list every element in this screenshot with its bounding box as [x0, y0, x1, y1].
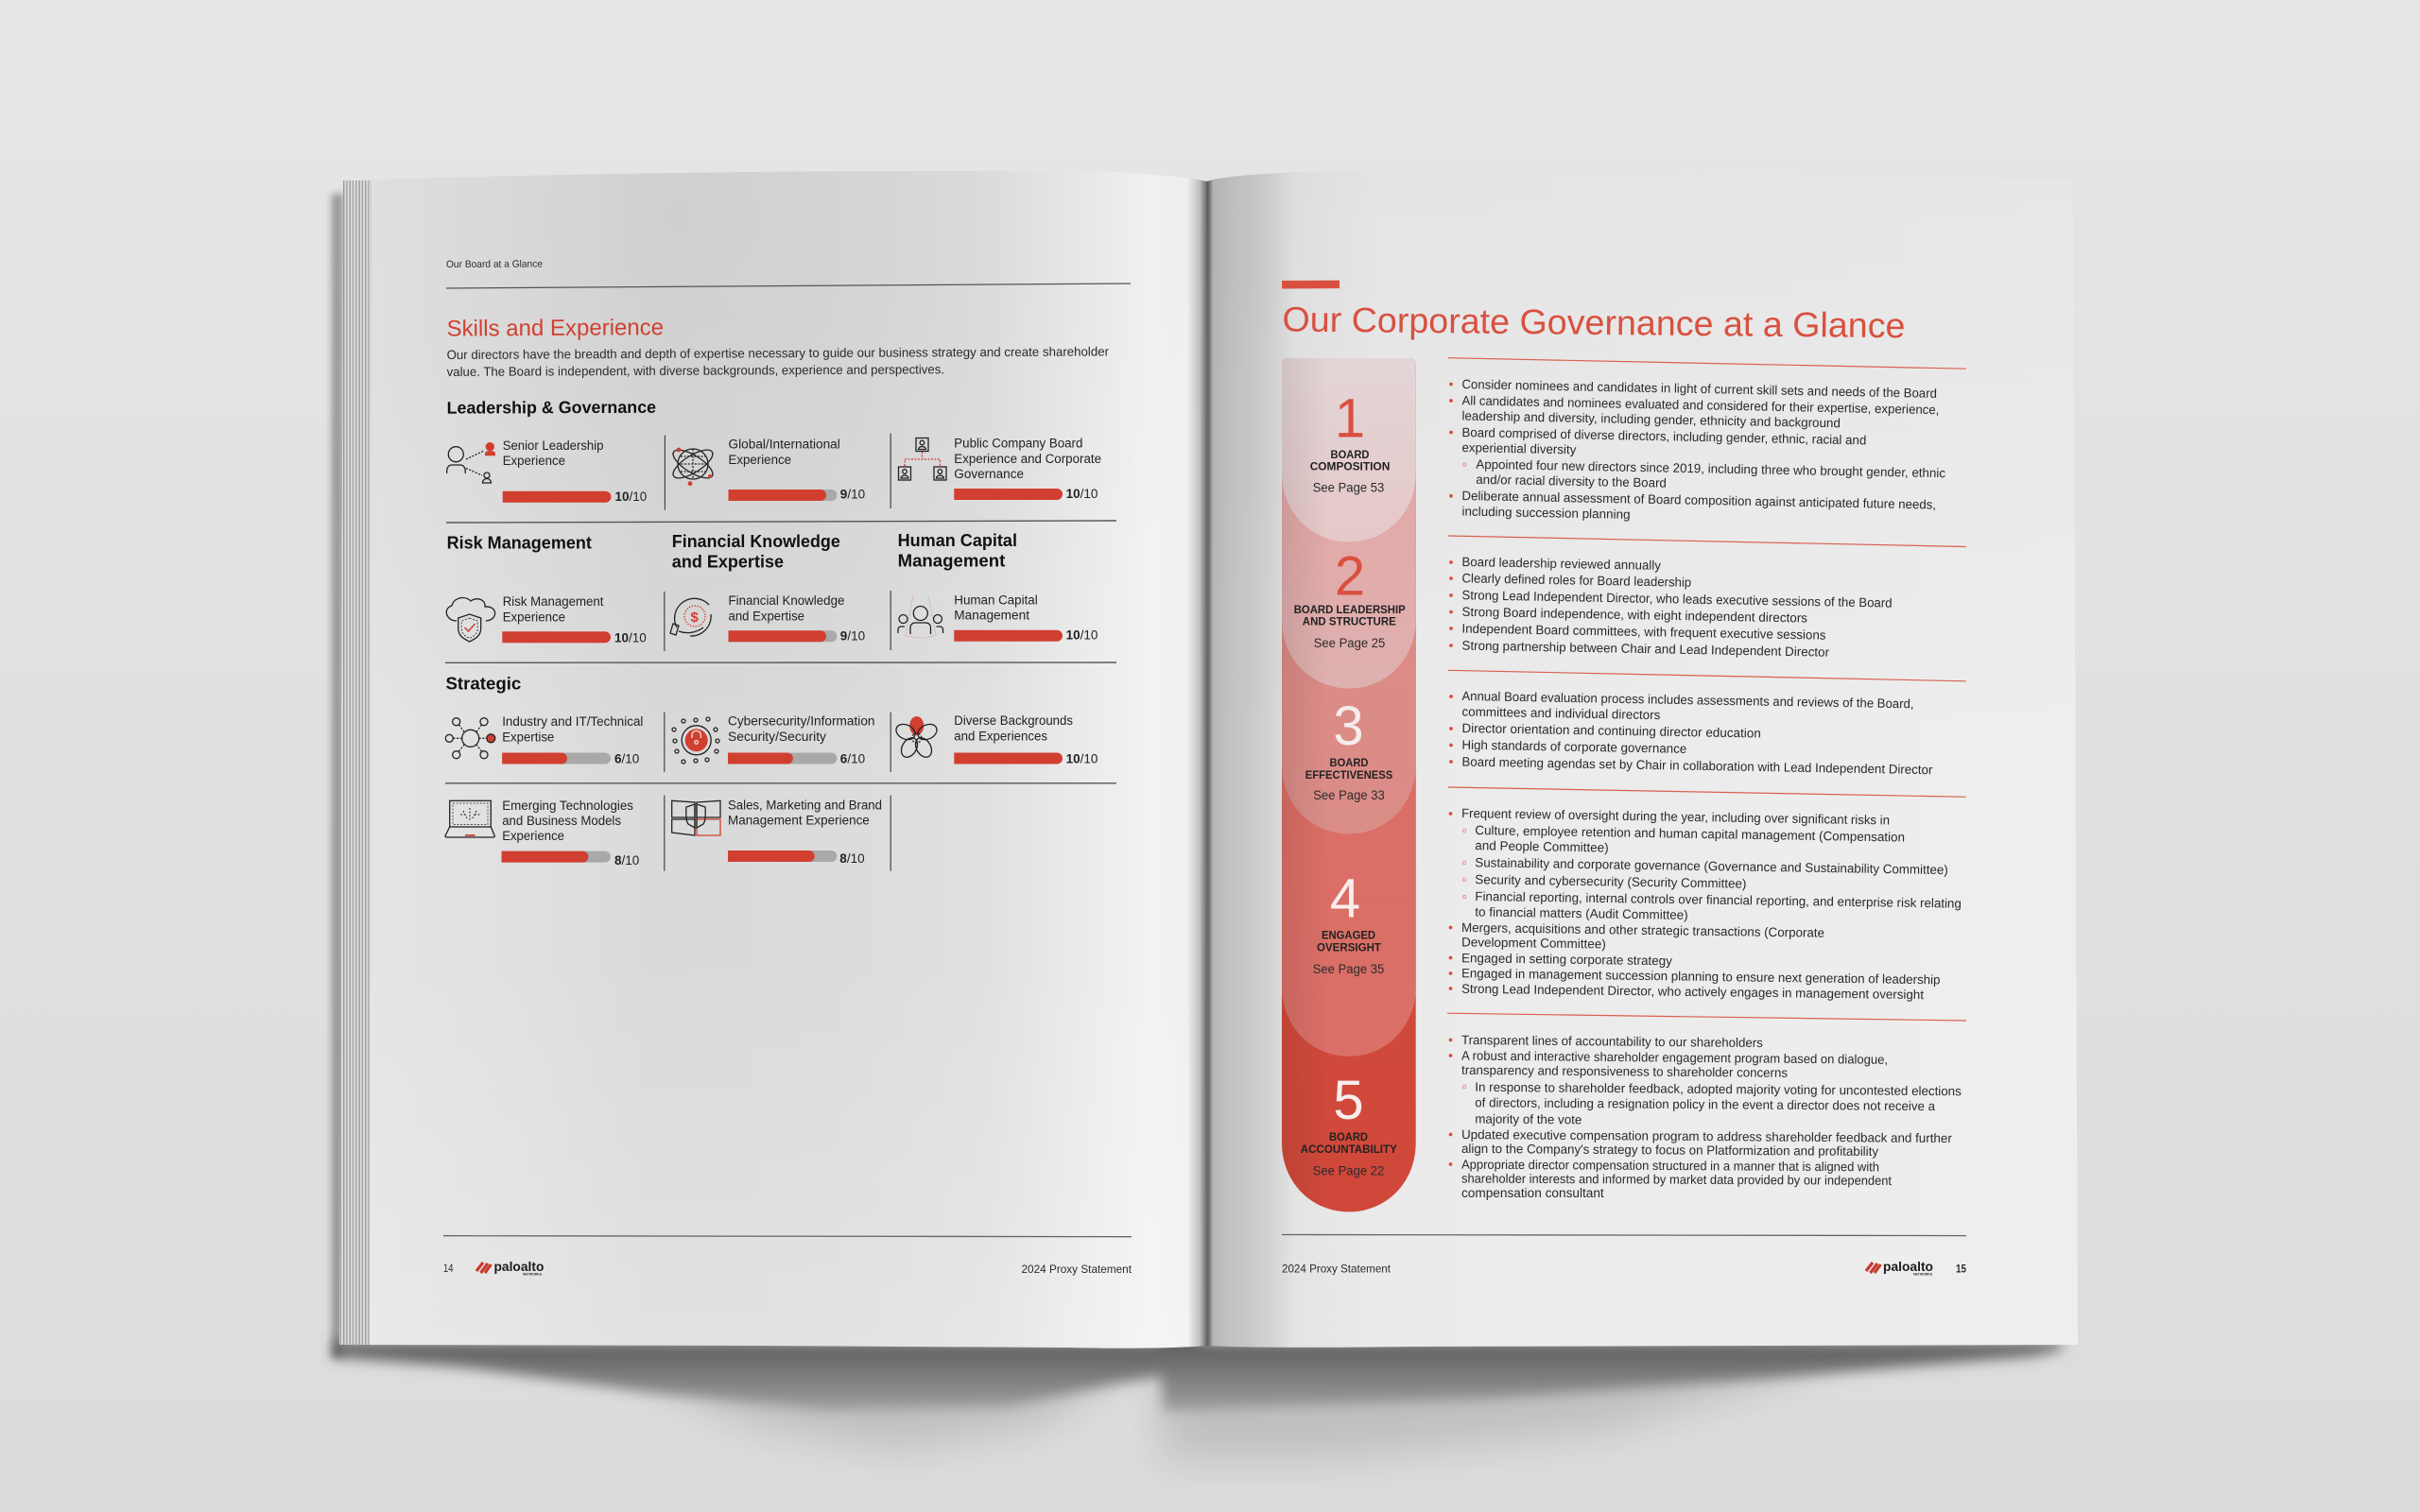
skill: sales and marketing: Sales, Marketing and Brand — [728, 799, 882, 813]
intro paragraph: Our directors have the breadth and depth of expertise necessary to guide our business strategy and create shareholder — [447, 344, 1110, 362]
bullets: engaged oversight: Culture, employee retention and human capital management (Compensation — [1475, 823, 1905, 845]
heading: human capital: Management — [898, 551, 1005, 570]
bullets: board effectiveness: committees and individual directors — [1461, 705, 1661, 722]
heading: leadership and governance: Leadership & Governance — [447, 398, 656, 418]
score bar 8/10 — [502, 851, 611, 863]
pillar 3 labels: 3 — [1333, 696, 1364, 757]
bullets: board accountability: Transparent lines of accountability to our shareholders — [1461, 1033, 1763, 1050]
skill: global international — [669, 437, 865, 502]
icon: leadership people — [447, 442, 495, 483]
skill: cybersecurity: Cybersecurity/Information — [728, 714, 875, 728]
score bar 8/10 — [728, 850, 837, 862]
bullets: board composition: Consider nominees and candidates in light of current skill sets and needs of the Board — [1461, 377, 1937, 401]
bullets: board effectiveness — [1449, 689, 1933, 777]
skill: global international: Global/International — [728, 437, 840, 452]
pillar 5 labels: 5 — [1333, 1070, 1364, 1131]
bullets: board leadership and structure: Board leadership reviewed annually — [1461, 555, 1661, 573]
pillar 3 labels — [1305, 696, 1392, 802]
pillar 1 labels: BOARD — [1331, 448, 1370, 461]
pillar 4 labels: 4 — [1330, 868, 1360, 930]
right page — [1207, 170, 2078, 1348]
heading: human capital — [898, 531, 1017, 570]
bullets: engaged oversight: Engaged in setting corporate strategy — [1461, 951, 1672, 968]
bullets: board accountability: Appropriate director compensation structured in a manner that is aligned with — [1461, 1158, 1879, 1174]
pillar 3 labels: EFFECTIVENESS — [1305, 768, 1392, 782]
bullets: board effectiveness: Director orientation and continuing director education — [1461, 721, 1761, 741]
right page sheet — [1207, 170, 2078, 1348]
logo: palo alto: paloalto — [493, 1259, 544, 1274]
left page — [339, 168, 1210, 1351]
skill: senior leadership: Senior Leadership — [503, 438, 603, 453]
icon: org chart — [898, 438, 946, 480]
score bar 10/10 — [954, 489, 1063, 500]
skill: industry and technical: Industry and IT/Technical — [502, 714, 643, 729]
bullets: board leadership and structure — [1449, 555, 1893, 660]
bullets: board accountability: of directors, including a resignation policy in the event a director does not receive a — [1475, 1095, 1936, 1113]
icon: globe with orbits — [669, 445, 717, 486]
bullets: engaged oversight: Engaged in management succession planning to ensure next generation of leadership — [1461, 966, 1941, 987]
skill: cybersecurity — [672, 714, 875, 765]
icon: hand with dollar — [670, 598, 711, 636]
skill: cybersecurity: Security/Security — [728, 730, 826, 744]
bullets: board effectiveness: Board meeting agendas set by Chair in collaboration with Lead Independent Director — [1461, 755, 1933, 777]
icon: shield panels — [672, 800, 720, 835]
pillar 1 labels — [1310, 387, 1390, 495]
score bar 6/10 — [502, 752, 611, 764]
skill: diverse backgrounds — [893, 713, 1098, 765]
skill: global international: Experience — [728, 453, 791, 467]
footer: right page — [1282, 1259, 1966, 1276]
bullets: engaged oversight: Security and cybersecurity (Security Committee) — [1475, 872, 1747, 891]
panel: governance pillars column — [1282, 358, 1416, 1211]
pillar 4 labels: See Page 35 — [1313, 962, 1384, 976]
pillar 1 labels: COMPOSITION — [1310, 460, 1390, 473]
footer: left page: 2024 Proxy Statement — [1021, 1263, 1132, 1276]
pillar 5 labels: See Page 22 — [1313, 1163, 1384, 1177]
footer: left page: 14 — [443, 1263, 454, 1275]
pillar 2 labels: 2 — [1335, 546, 1365, 608]
intro paragraph — [447, 344, 1110, 379]
skill: public company board: Public Company Board — [954, 437, 1082, 450]
bullets: board leadership and structure: Clearly defined roles for Board leadership — [1461, 571, 1691, 590]
pillar 1 shape — [1282, 358, 1416, 542]
score bar 9/10 — [728, 630, 837, 642]
score bar 10/10 — [954, 630, 1063, 642]
bullets: engaged oversight: Financial reporting, internal controls over financial reporting, and enterprise risk relating — [1475, 889, 1962, 911]
footer: right page: 2024 Proxy Statement — [1282, 1263, 1392, 1276]
pillar 2 labels — [1294, 546, 1406, 650]
skill: sales and marketing — [672, 799, 882, 866]
bullets: engaged oversight: and People Committee) — [1475, 838, 1609, 855]
heading: human capital: Human Capital — [898, 531, 1017, 550]
bullets: board composition: leadership and diversity, including gender, ethnicity and background — [1461, 408, 1841, 430]
skill: public company board: Governance — [954, 467, 1024, 481]
skill: sales and marketing: Management Experience — [728, 813, 870, 828]
heading: financial knowledge: Financial Knowledge — [672, 532, 840, 551]
icon: three people — [898, 595, 943, 638]
bullets: board composition: and/or racial diversity to the Board — [1476, 472, 1667, 490]
skill: emerging technologies — [445, 799, 639, 868]
skill: emerging technologies: and Business Models — [502, 814, 621, 828]
skill: public company board — [898, 437, 1101, 501]
pillar 2 labels: See Page 25 — [1314, 636, 1385, 650]
book shadow — [332, 194, 2062, 1460]
bullets: board effectiveness: High standards of corporate governance — [1461, 738, 1686, 756]
pillar 2 shape — [1282, 358, 1416, 688]
skill: industry and technical: 6/10 — [614, 751, 639, 765]
footer: left page — [443, 1259, 1132, 1276]
icon: hand with dollar: $ — [690, 610, 700, 626]
icon: flower — [893, 716, 940, 760]
logo: palo alto: NETWORKS — [1913, 1272, 1933, 1276]
pillar side shading — [1282, 358, 1416, 1211]
pillar 5 labels: BOARD — [1329, 1130, 1368, 1143]
heading: financial knowledge: and Expertise — [672, 552, 784, 571]
intro paragraph: value. The Board is independent, with diverse backgrounds, experience and perspectives. — [447, 362, 944, 379]
bullets: engaged oversight: to financial matters (Audit Committee) — [1475, 905, 1688, 922]
logo: palo alto: NETWORKS — [523, 1272, 543, 1276]
page shading bottom — [685, 1346, 957, 1348]
pillar 3 labels: See Page 33 — [1313, 788, 1385, 802]
heading: financial knowledge — [672, 532, 840, 571]
skill: diverse backgrounds: and Experiences — [954, 729, 1047, 743]
skill: emerging technologies: 8/10 — [614, 853, 639, 868]
skill: industry and technical: Expertise — [502, 730, 554, 744]
skill: human capital — [898, 593, 1098, 643]
bullets: board composition: including succession planning — [1461, 505, 1631, 522]
logo: palo alto: paloalto — [1883, 1259, 1933, 1274]
skill: human capital: Management — [954, 609, 1029, 623]
icon: lock circuit — [672, 717, 719, 764]
score bar 9/10 — [728, 490, 837, 501]
pillar 2 labels: BOARD LEADERSHIP — [1294, 603, 1406, 616]
skill: senior leadership: 10/10 — [614, 490, 647, 504]
skill: industry and technical — [445, 714, 643, 765]
right page top shading — [1207, 170, 2075, 756]
page shading top — [541, 172, 811, 346]
skill: senior leadership: Experience — [503, 454, 565, 468]
bullets: board composition — [1449, 377, 1945, 522]
bullets: engaged oversight: Frequent review of oversight during the year, including over significant risks in — [1461, 806, 1890, 828]
skill: diverse backgrounds: Diverse Backgrounds — [954, 713, 1073, 728]
bullets: board accountability: In response to shareholder feedback, adopted majority voting for uncontested elections — [1475, 1080, 1962, 1098]
skill: diverse backgrounds: 10/10 — [1066, 751, 1098, 765]
bullets: board accountability — [1449, 1033, 1962, 1200]
bullets: board effectiveness: Annual Board evaluation process includes assessments and reviews of the Board, — [1461, 689, 1914, 711]
bullets: board accountability: A robust and interactive shareholder engagement program based on dialogue, — [1461, 1049, 1888, 1067]
skill: sales and marketing: 8/10 — [839, 851, 865, 866]
bullets: board accountability: compensation consultant — [1461, 1186, 1604, 1200]
bullets: board accountability: align to the Company's strategy to focus on Platformization and profitability — [1461, 1142, 1878, 1159]
bullets: board composition: Deliberate annual assessment of Board composition against anticipated future needs, — [1461, 489, 1936, 512]
bullets: board leadership and structure: Strong Lead Independent Director, who leads executive sessions of the Board — [1461, 588, 1893, 610]
accent bar — [1282, 281, 1340, 288]
score bar 6/10 — [728, 752, 837, 764]
bullets: board composition: Appointed four new directors since 2019, including three who brought gender, ethnic — [1476, 457, 1945, 480]
skill: emerging technologies: Experience — [502, 829, 564, 843]
title: Our Corporate Governance at a Glance — [1282, 300, 1906, 345]
bullets: board leadership and structure: Strong partnership between Chair and Lead Independent Director — [1461, 639, 1830, 660]
skill: human capital: 10/10 — [1066, 627, 1098, 643]
logo: palo alto — [1866, 1259, 1933, 1276]
skill: public company board: 10/10 — [1066, 487, 1098, 501]
pillar 1 labels: 1 — [1335, 387, 1365, 450]
pillar 5 labels — [1301, 1070, 1397, 1177]
bullets: board composition: All candidates and nominees evaluated and considered for their expertise, experience, — [1461, 393, 1940, 417]
skill: risk management: 10/10 — [614, 631, 647, 644]
logo: palo alto — [476, 1259, 544, 1276]
score bar 10/10 — [954, 752, 1063, 764]
heading: risk management: Risk Management — [447, 533, 592, 552]
pillar 1 labels: See Page 53 — [1313, 481, 1384, 495]
bullets: engaged oversight: Strong Lead Independent Director, who actively engages in management oversight — [1461, 982, 1924, 1002]
bullets: engaged oversight: Development Committee) — [1461, 935, 1606, 952]
pillar 5 shape — [1282, 358, 1416, 1211]
bullets: board accountability: transparency and responsiveness to shareholder concerns — [1461, 1063, 1788, 1080]
pillar 2 labels: AND STRUCTURE — [1303, 614, 1396, 627]
pillar 3 labels: BOARD — [1329, 756, 1369, 769]
pillar 4 labels: OVERSIGHT — [1317, 940, 1382, 954]
skill: financial knowledge: Financial Knowledge — [728, 593, 844, 608]
skill: senior leadership — [447, 438, 647, 504]
bullets: engaged oversight: Sustainability and corporate governance (Governance and Sustainability Committee) — [1475, 855, 1948, 877]
pillar 4 labels: ENGAGED — [1322, 928, 1375, 941]
skill: emerging technologies: Emerging Technologies — [502, 799, 633, 813]
running header: Our Board at a Glance — [446, 258, 543, 270]
bullets: engaged oversight — [1449, 806, 1962, 1002]
bullets: board accountability: Updated executive compensation program to address shareholder feedback and further — [1461, 1127, 1952, 1145]
score bar 10/10 — [503, 491, 611, 503]
bullets: engaged oversight: Mergers, acquisitions and other strategic transactions (Corporate — [1461, 920, 1824, 940]
footer: right page: 15 — [1956, 1263, 1966, 1276]
pillar 5 labels: ACCOUNTABILITY — [1301, 1143, 1397, 1156]
icon: laptop — [445, 800, 494, 837]
pillar 4 labels — [1313, 868, 1384, 976]
skill: financial knowledge: and Expertise — [728, 610, 804, 624]
skill: risk management: Risk Management — [503, 594, 604, 609]
heading: strategic: Strategic — [446, 675, 521, 694]
bullets: board leadership and structure: Strong Board independence, with eight independent directors — [1461, 605, 1807, 626]
pillar 4 shape — [1282, 358, 1416, 1057]
bullets: board composition: Board comprised of diverse directors, including gender, ethnic, racial and — [1461, 425, 1866, 447]
icon: network hub — [445, 718, 495, 759]
pillar 3 shape — [1282, 358, 1416, 833]
skill: risk management: Experience — [503, 610, 565, 625]
bullets: board accountability: shareholder interests and informed by market data provided by our independent — [1461, 1172, 1892, 1188]
score bar 10/10 — [502, 631, 611, 643]
bullets: board accountability: majority of the vote — [1475, 1112, 1582, 1126]
skill: financial knowledge: 9/10 — [840, 629, 865, 643]
left page sheet — [370, 171, 1208, 1349]
bullets: board leadership and structure: Independent Board committees, with frequent executive sessions — [1461, 622, 1826, 643]
skill: financial knowledge — [670, 593, 865, 643]
bullets: board composition: experiential diversity — [1461, 440, 1577, 456]
skill: risk management — [446, 594, 647, 644]
page edge stack — [339, 180, 372, 1345]
icon: cloud and shield — [446, 598, 495, 642]
heading: skills and experience: Skills and Experience — [446, 315, 664, 342]
skill: cybersecurity: 6/10 — [840, 751, 865, 765]
skill: global international: 9/10 — [840, 488, 865, 502]
skill: human capital: Human Capital — [954, 593, 1038, 608]
skill: public company board: Experience and Corporate — [954, 452, 1101, 466]
